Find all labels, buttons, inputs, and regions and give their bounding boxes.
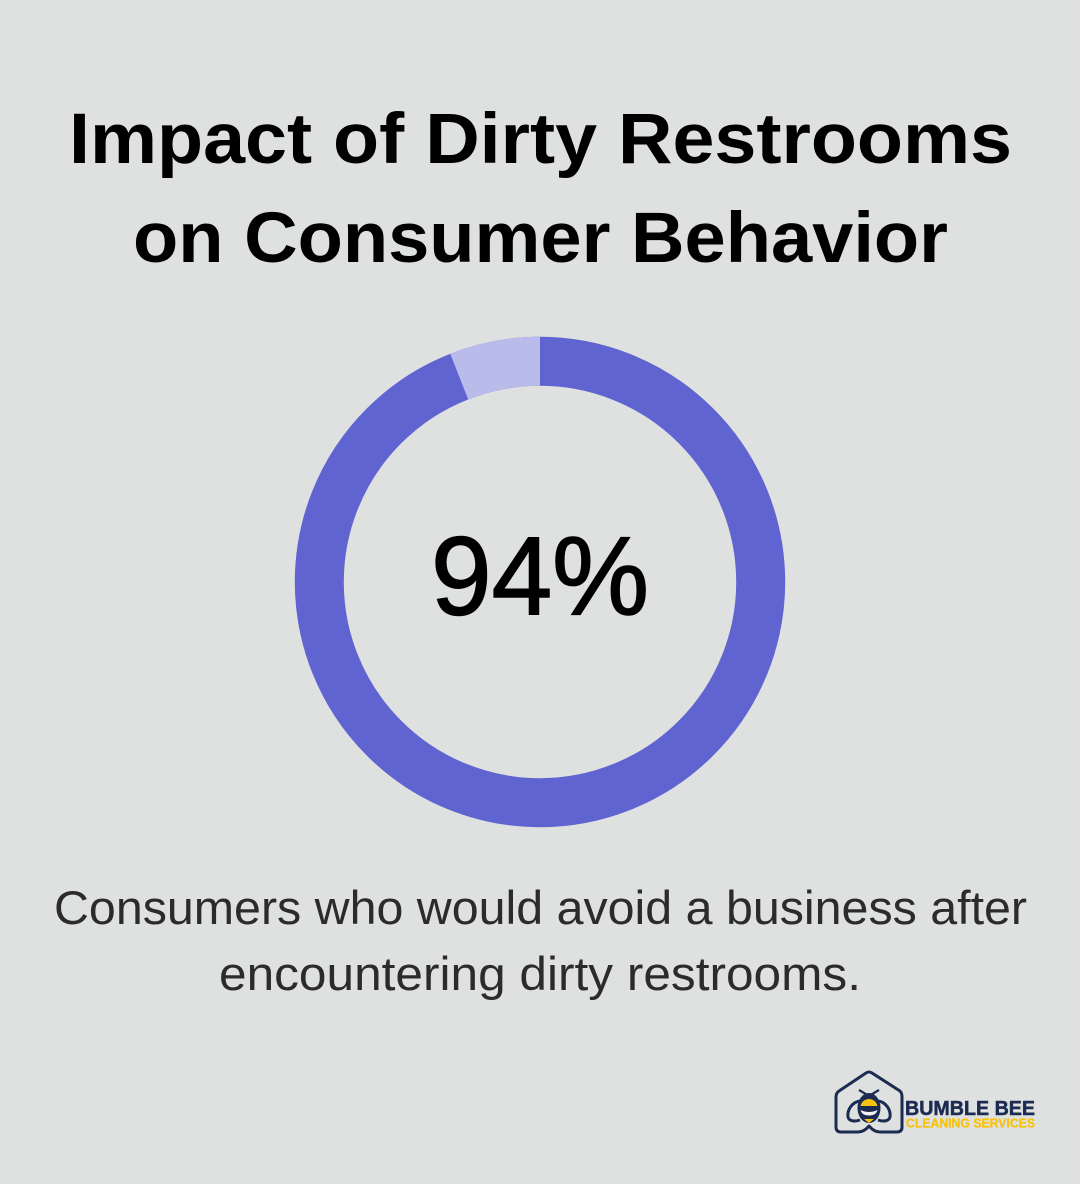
title: on Consumer Behavior xyxy=(133,199,948,278)
logo name: BUMBLE BEE xyxy=(905,1098,1035,1120)
donut chart: 94% xyxy=(319,361,761,803)
description: encountering dirty restrooms. xyxy=(219,947,861,1000)
logo: Bumble Bee Cleaning Services xyxy=(836,1072,1035,1132)
logo tagline: CLEANING SERVICES xyxy=(906,1116,1035,1130)
description: Consumers who would avoid a business after xyxy=(54,881,1027,934)
title xyxy=(69,100,1012,278)
description xyxy=(54,881,1027,1000)
icon: house with bee xyxy=(836,1072,902,1132)
statistic: 94%: 94% xyxy=(431,514,649,638)
title: Impact of Dirty Restrooms xyxy=(69,100,1012,179)
